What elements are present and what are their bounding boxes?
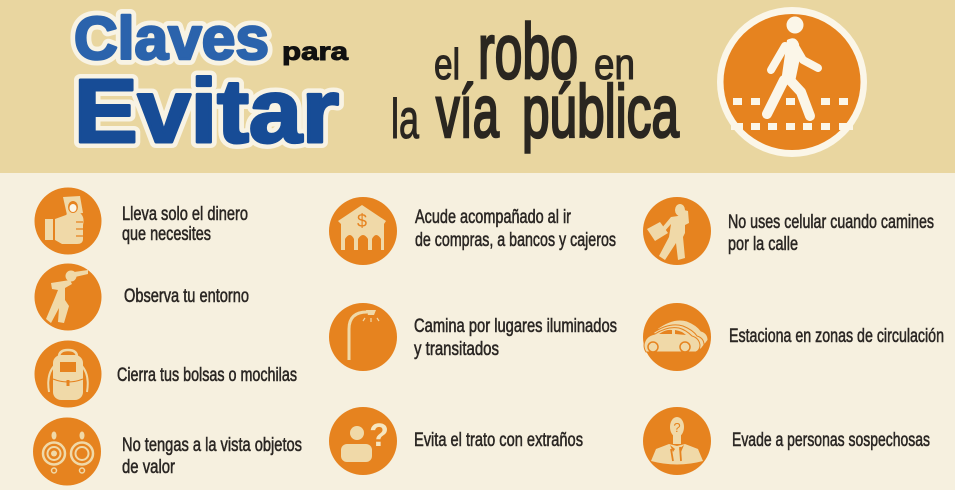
item: Evita el trato con extraños (329, 407, 583, 475)
title: el robo en la vía pública: la (391, 87, 420, 150)
text: Evita el trato con extraños: Evita el trato con extraños (414, 429, 583, 451)
icon: bank: $ (357, 211, 367, 231)
text: Observa tu entorno: Observa tu entorno (124, 285, 249, 307)
item: Acude acompañado (329, 197, 616, 265)
item: Camina por lugares iluminados (329, 303, 617, 371)
item: No tengas a la vista objetos de valor (33, 418, 302, 486)
title: Claves para Evitar: para (282, 38, 349, 66)
title: el robo en la vía pública: vía (436, 70, 500, 153)
icon: backpack (34, 340, 102, 408)
icon: person with spyglass (34, 264, 102, 330)
body panel (0, 173, 955, 490)
item: Cierra tus bolsas (34, 340, 297, 408)
title: el robo en la vía pública: pública (522, 70, 680, 153)
title: el robo en la vía pública: en (594, 40, 635, 89)
text: Camina por lugares iluminados y transitados (414, 315, 617, 360)
text: No tengas a la vista objetos de valor: de valor (122, 456, 175, 478)
icon: bank (329, 197, 397, 265)
text: No tengas a la vista objetos de valor (122, 434, 302, 478)
icon: suspicious person (643, 407, 711, 475)
text: Lleva solo el dinero que necesites: que necesites (122, 223, 211, 245)
text: Acude acompañado al ir de compras, a bancos y cajeros: Acude acompañado al ir (415, 206, 571, 228)
item: Estaciona en zonas de circulación (643, 303, 944, 371)
title: Claves para Evitar (74, 5, 349, 162)
text: Camina por lugares iluminados y transitados: Camina por lugares iluminados (414, 315, 617, 337)
title: el robo en la vía pública (391, 7, 680, 153)
text: Cierra tus bolsas o mochilas: Cierra tus bolsas o mochilas (117, 364, 297, 386)
icon: earrings (33, 418, 101, 486)
title: el robo en la vía pública: robo (478, 7, 578, 95)
text: Acude acompañado al ir de compras, a bancos y cajeros: de compras, a bancos y cajeros (415, 229, 616, 251)
text: Camina por lugares iluminados y transitados: y transitados (414, 338, 499, 360)
item: No uses celular (643, 197, 934, 265)
text: No uses celular cuando camines por la calle (728, 211, 934, 255)
text: Acude acompañado al ir de compras, a bancos y cajeros (415, 206, 616, 251)
icon: street lamp (329, 303, 397, 371)
title: Claves para Evitar: Evitar (74, 62, 339, 162)
text: Lleva solo el dinero que necesites: Lleva solo el dinero (122, 203, 248, 225)
icon: parked cars (643, 303, 711, 371)
icon: person with question mark: ? (369, 417, 389, 453)
icon: person with question mark (329, 407, 397, 475)
title: Claves para Evitar: Evitar (74, 62, 339, 162)
item: Lleva solo el dinero (34, 188, 248, 254)
text: Lleva solo el dinero que necesites (122, 203, 248, 245)
title: el robo en la vía pública: el (434, 40, 460, 89)
text: No tengas a la vista objetos de valor: No tengas a la vista objetos (122, 434, 302, 456)
text: No uses celular cuando camines por la calle: por la calle (728, 233, 798, 255)
icon: hand holding money (34, 188, 102, 254)
title: Claves para Evitar: Claves (74, 5, 269, 72)
icon: person walking on phone (643, 197, 711, 265)
icon: suspicious person: ? (673, 420, 681, 435)
header band (0, 0, 955, 173)
item: Observa tu entorno (34, 264, 249, 330)
icon: pedestrian crossing (717, 7, 867, 157)
title: Claves para Evitar: Claves (74, 5, 269, 72)
item: Evade a personas sospechosas (643, 407, 930, 475)
